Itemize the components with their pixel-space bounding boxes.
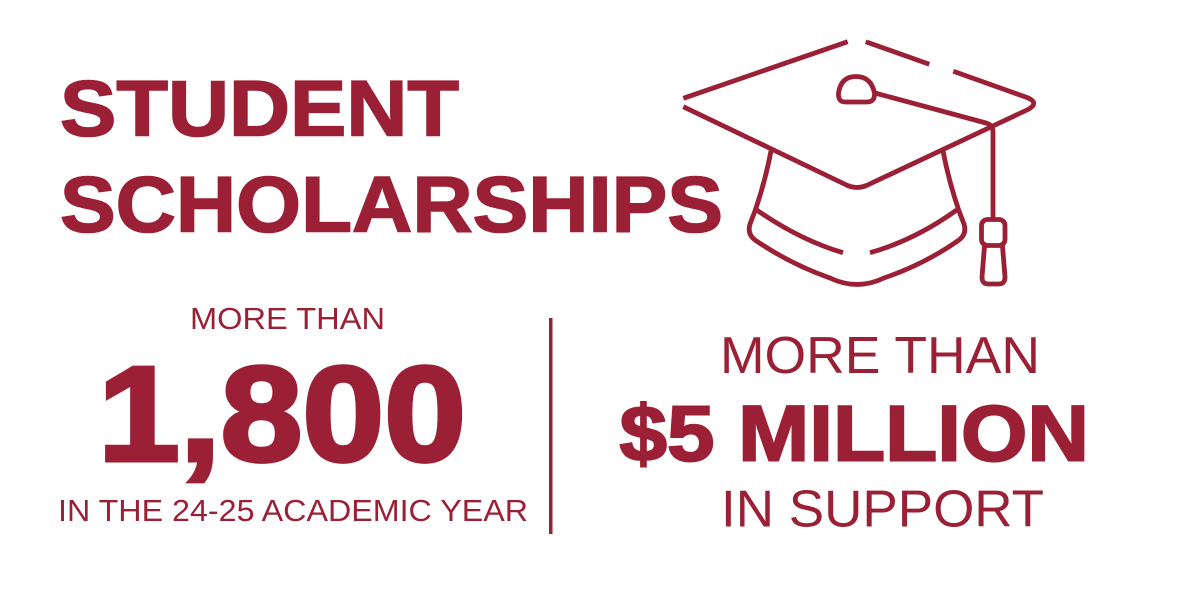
stat: 1,800 scholarships: IN THE 24-25 ACADEMIC YEAR bbox=[58, 493, 528, 528]
divider bbox=[549, 318, 552, 534]
stat: $5 million in support: $5 MILLION bbox=[620, 388, 1089, 478]
stat: 1,800 scholarships: MORE THAN bbox=[190, 301, 385, 336]
stat: $5 million in support: MORE THAN bbox=[720, 327, 1040, 385]
title: SCHOLARSHIPS bbox=[60, 160, 723, 248]
title bbox=[60, 64, 723, 248]
icon: graduation cap bbox=[683, 42, 1034, 285]
stat: 1,800 scholarships bbox=[58, 301, 528, 528]
stat: $5 million in support bbox=[620, 327, 1089, 538]
title: STUDENT bbox=[60, 64, 459, 152]
stat: 1,800 scholarships: 1,800 bbox=[98, 338, 466, 490]
stat: $5 million in support: IN SUPPORT bbox=[721, 480, 1044, 538]
